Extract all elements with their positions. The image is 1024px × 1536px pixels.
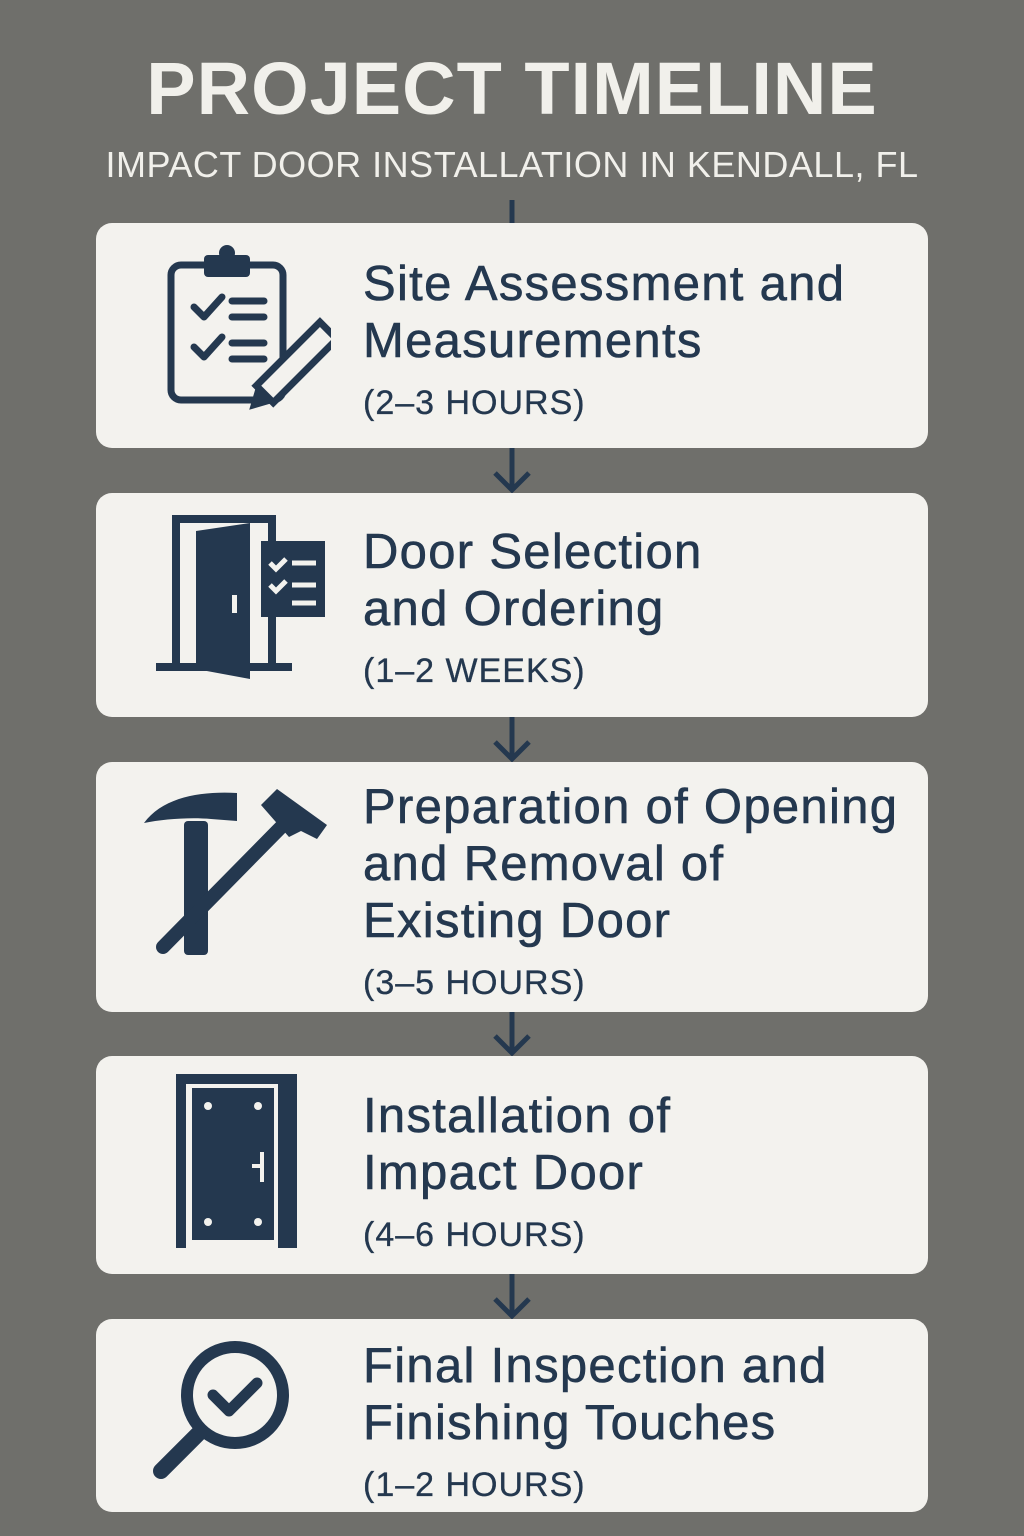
text: step 1: Site Assessment and	[363, 257, 845, 311]
text: step 1: (2–3 HOURS)	[363, 384, 586, 422]
text: step 5: Final Inspection and	[363, 1339, 828, 1393]
panel: step 2	[96, 493, 928, 717]
icon: hammers	[144, 789, 327, 955]
text: step 3: Existing Door	[363, 894, 671, 948]
title: PROJECT TIMELINE	[146, 47, 878, 130]
text: step 4: (4–6 HOURS)	[363, 1216, 586, 1254]
text: step 2: (1–2 WEEKS)	[363, 652, 586, 690]
text: step 2: Door Selection	[363, 525, 703, 579]
panel: step 3	[96, 762, 928, 1012]
panel: step 4	[96, 1056, 928, 1274]
text: step 2	[363, 525, 703, 690]
icon: door with checklist	[156, 515, 325, 679]
text: step 4: Impact Door	[363, 1146, 644, 1200]
text: step 3: Preparation of Opening	[363, 780, 898, 834]
icon: clipboard	[168, 245, 331, 410]
icon: impact door	[176, 1074, 297, 1248]
panel: step 1	[96, 223, 928, 448]
icon: magnifier check	[153, 1341, 289, 1479]
subtitle: IMPACT DOOR INSTALLATION IN KENDALL, FL	[106, 144, 918, 185]
text: step 4	[363, 1089, 671, 1254]
panel: step 5	[96, 1319, 928, 1512]
text: step 3	[363, 780, 898, 1002]
text: step 1: Measurements	[363, 314, 703, 368]
text: step 3: and Removal of	[363, 837, 724, 891]
text: step 5: (1–2 HOURS)	[363, 1466, 586, 1504]
text: step 3: (3–5 HOURS)	[363, 964, 586, 1002]
text: step 1	[363, 257, 845, 422]
text: step 2: and Ordering	[363, 582, 665, 636]
text: step 5	[363, 1339, 828, 1504]
text: step 4: Installation of	[363, 1089, 671, 1143]
text: step 5: Finishing Touches	[363, 1396, 776, 1450]
